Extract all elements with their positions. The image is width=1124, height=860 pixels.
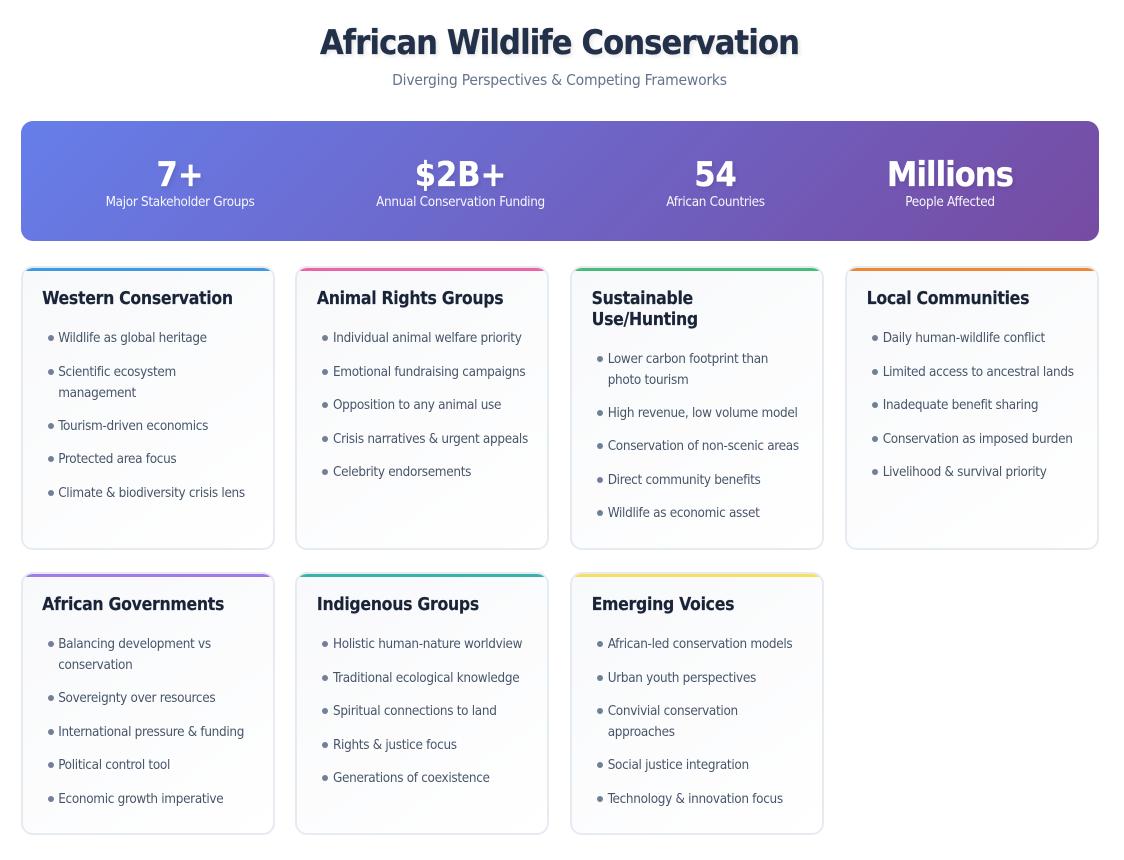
panel: Animal Rights Groups: Crisis narratives & urgent appeals	[333, 432, 528, 447]
panel: Emerging Voices: approaches	[608, 724, 675, 740]
panel: Western Conservation: Tourism-driven economics	[58, 419, 208, 434]
panel: African Governments: Balancing development vs	[58, 637, 211, 652]
panel: African Governments: Sovereignty over resources	[58, 691, 215, 706]
panel: Animal Rights Groups	[295, 266, 549, 550]
panel: Sustainable Use/Hunting: High revenue, low volume model	[608, 406, 798, 421]
heading: African Governments	[42, 595, 224, 615]
panel: African Governments	[20, 572, 274, 835]
panel: Western Conservation: Climate & biodiversity crisis lens	[58, 486, 245, 501]
panel: Emerging Voices: Social justice integration	[608, 758, 749, 773]
stat: countries: 54	[694, 155, 737, 195]
list	[872, 331, 1074, 480]
title: African Wildlife Conservation	[320, 23, 799, 63]
heading: Emerging Voices	[592, 595, 734, 615]
heading: Use/Hunting	[592, 310, 698, 330]
panel: Western Conservation: Protected area focus	[58, 452, 176, 467]
heading: Local Communities	[867, 289, 1029, 309]
panel: Western Conservation: management	[58, 386, 136, 400]
stat: stakeholder groups: 7+	[157, 155, 203, 195]
panel: African Governments: conservation	[58, 658, 132, 672]
panel: African Governments: International pressure & funding	[58, 725, 244, 740]
panel: Indigenous Groups: Traditional ecological knowledge	[333, 671, 519, 686]
panel: Emerging Voices: Urban youth perspectives	[608, 671, 756, 686]
panel: Indigenous Groups: Spiritual connections to land	[333, 704, 497, 719]
list	[322, 637, 522, 786]
panel: Emerging Voices: Technology & innovation focus	[608, 792, 783, 807]
panel: Local Communities: Conservation as imposed burden	[883, 432, 1073, 447]
stat: stakeholder groups	[106, 155, 254, 210]
panel: Indigenous Groups: Holistic human-nature worldview	[333, 637, 522, 652]
stat: funding: Annual Conservation Funding	[376, 194, 545, 210]
panel: Sustainable Use/Hunting: Direct community benefits	[608, 473, 761, 488]
stat: people: Millions	[887, 155, 1013, 195]
panel: Local Communities: Daily human-wildlife conflict	[883, 331, 1045, 346]
panel: Emerging Voices: African-led conservation models	[608, 637, 792, 652]
list	[322, 331, 528, 480]
stat: funding: $2B+	[415, 155, 506, 195]
panel: African Governments: Economic growth imperative	[58, 792, 223, 807]
heading: Western Conservation	[42, 289, 233, 309]
panel: Western Conservation	[20, 266, 274, 550]
panel: Indigenous Groups	[295, 572, 549, 835]
panel: Local Communities: Limited access to ancestral lands	[883, 365, 1074, 380]
panel: stats banner	[20, 121, 1098, 241]
list	[48, 637, 244, 807]
list	[48, 331, 245, 501]
subtitle: Diverging Perspectives & Competing Frameworks	[392, 70, 727, 88]
stat: countries	[666, 155, 765, 210]
panel: Sustainable Use/Hunting: Conservation of non-scenic areas	[608, 439, 799, 454]
panel: Sustainable Use/Hunting	[570, 266, 824, 550]
panel: Local Communities: Inadequate benefit sharing	[883, 398, 1038, 413]
heading: Animal Rights Groups	[317, 289, 503, 309]
panel: Sustainable Use/Hunting: Wildlife as economic asset	[608, 506, 760, 521]
heading	[592, 289, 698, 330]
panel: Western Conservation: Scientific ecosystem	[58, 365, 176, 380]
panel: Sustainable Use/Hunting: Lower carbon footprint than	[608, 352, 768, 367]
panel: Animal Rights Groups: Celebrity endorsements	[333, 465, 471, 480]
stat: stakeholder groups: Major Stakeholder Groups	[106, 194, 254, 210]
panel: Animal Rights Groups: Emotional fundraising campaigns	[333, 365, 525, 380]
stat: people: People Affected	[905, 194, 995, 210]
panel: Sustainable Use/Hunting: photo tourism	[608, 372, 688, 388]
list	[597, 352, 799, 521]
heading: Sustainable	[592, 289, 693, 309]
panel: Animal Rights Groups: Individual animal welfare priority	[333, 331, 522, 346]
panel: Emerging Voices	[570, 572, 824, 835]
panel: Indigenous Groups: Generations of coexistence	[333, 771, 490, 786]
stat: countries: African Countries	[666, 194, 765, 210]
panel: Western Conservation: Wildlife as global heritage	[58, 331, 207, 346]
panel: Animal Rights Groups: Opposition to any animal use	[333, 398, 501, 413]
panel: Local Communities	[845, 266, 1099, 550]
panel: Indigenous Groups: Rights & justice focus	[333, 738, 457, 753]
panel: Local Communities: Livelihood & survival priority	[883, 465, 1047, 480]
panel: Emerging Voices: Convivial conservation	[608, 704, 738, 719]
stat: funding	[376, 155, 545, 210]
list	[597, 637, 792, 807]
heading: Indigenous Groups	[317, 595, 479, 615]
panel: African Governments: Political control tool	[58, 758, 170, 773]
